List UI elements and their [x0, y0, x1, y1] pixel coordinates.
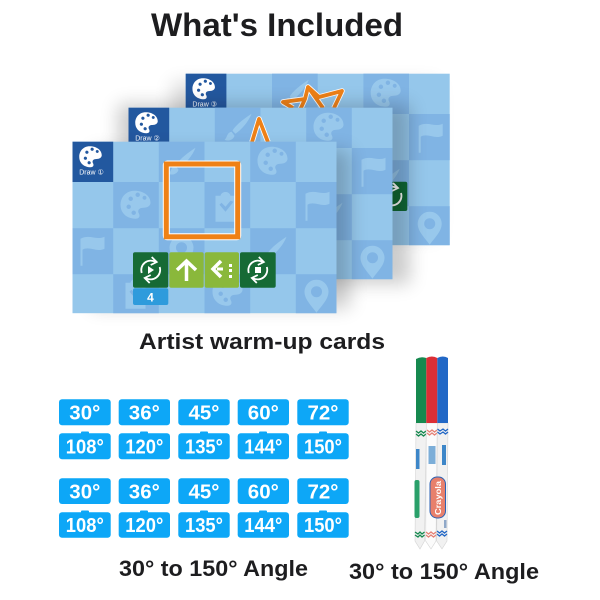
- row: second set large angles: 144°: [244, 515, 282, 537]
- row: first set small angles: [59, 399, 349, 425]
- row: second set small angles: 45°: [188, 482, 220, 504]
- row: second set small angles: 30°: [69, 482, 100, 504]
- card: Draw 1 (front): [72, 142, 350, 313]
- orange square drawing: [166, 164, 238, 237]
- row: second set small angles: 72°: [308, 482, 338, 504]
- row: first set large angles: 120°: [125, 436, 163, 458]
- row: first set small angles: 72°: [308, 402, 338, 424]
- row: first set large angles: [59, 432, 349, 459]
- marker: blue: [437, 356, 448, 549]
- row: first set small angles: 60°: [248, 402, 279, 424]
- panel: stacked artist warm-up cards: [72, 74, 450, 313]
- row: first set large angles: 135°: [185, 436, 223, 458]
- row: second set large angles: [59, 510, 349, 538]
- row: second set large angles: 135°: [185, 515, 223, 537]
- card: Draw 2 (middle): [118, 104, 410, 284]
- title: What's Included: [151, 7, 403, 43]
- caption: marker angle range: 30° to 150° Angle: [349, 559, 539, 584]
- row: second set small angles: 36°: [129, 482, 160, 504]
- caption: tiles angle range: 30° to 150° Angle: [119, 556, 308, 581]
- icon: three markers: [414, 356, 448, 549]
- card: Draw 3 (back): [172, 74, 450, 245]
- row: first set large angles: 144°: [244, 436, 282, 458]
- repeat count tag: 4: [147, 290, 154, 304]
- row: second set large angles: 120°: [125, 515, 163, 537]
- card: Draw 2 (middle): Draw ②: [135, 135, 160, 143]
- angle tiles grid: [59, 399, 349, 538]
- row: first set large angles: 150°: [304, 436, 342, 458]
- code blocks: [133, 252, 276, 288]
- card: Draw 1 (front): Draw ①: [79, 169, 104, 177]
- row: second set large angles: 108°: [66, 515, 104, 537]
- row: second set large angles: 150°: [304, 515, 342, 537]
- marker logo: Crayola: [430, 477, 446, 518]
- caption: artist warm-up cards: Artist warm-up cards: [139, 329, 385, 354]
- marker logo: Crayola: Crayola: [434, 480, 443, 515]
- row: first set small angles: 45°: [188, 402, 220, 424]
- row: first set large angles: 108°: [66, 436, 104, 458]
- repeat count tag: [133, 288, 168, 305]
- row: first set small angles: 30°: [69, 402, 100, 424]
- card: Draw 3 (back): Draw ③: [192, 101, 217, 109]
- row: first set small angles: 36°: [129, 402, 160, 424]
- marker: green: [414, 357, 426, 549]
- row: second set small angles: 60°: [248, 482, 279, 504]
- marker: red: [426, 356, 437, 549]
- row: second set small angles: [59, 478, 349, 504]
